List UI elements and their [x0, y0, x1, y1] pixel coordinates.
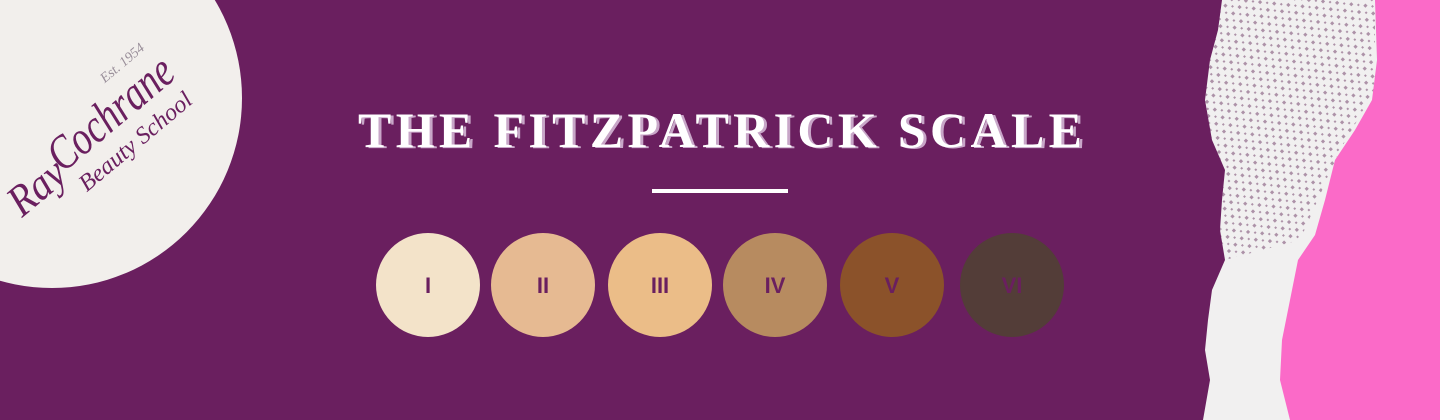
logo text: [0, 36, 201, 240]
swatch III: III: [651, 273, 669, 298]
swatch VI: VI: [1002, 273, 1022, 298]
swatch I: I: [425, 273, 431, 298]
skin tone swatches: [376, 233, 1064, 337]
logo text: Cochrane: [36, 45, 185, 182]
torn paper edge decoration: [1203, 0, 1440, 420]
swatch II: II: [537, 273, 549, 298]
logo text: Est. 1954: [97, 41, 148, 87]
swatch IV: [723, 233, 827, 337]
divider line: [652, 189, 788, 193]
swatch V: [840, 233, 944, 337]
swatch I: [376, 233, 480, 337]
title: THE FITZPATRICK SCALE: [361, 103, 1085, 159]
swatch V: V: [885, 273, 900, 298]
swatch VI: [960, 233, 1064, 337]
swatch III: [608, 233, 712, 337]
swatch II: [491, 233, 595, 337]
title: THE FITZPATRICK SCALE: [358, 102, 1082, 158]
swatch IV: IV: [765, 273, 786, 298]
logo badge: [0, 0, 242, 288]
logo text: Beauty School: [74, 87, 198, 197]
